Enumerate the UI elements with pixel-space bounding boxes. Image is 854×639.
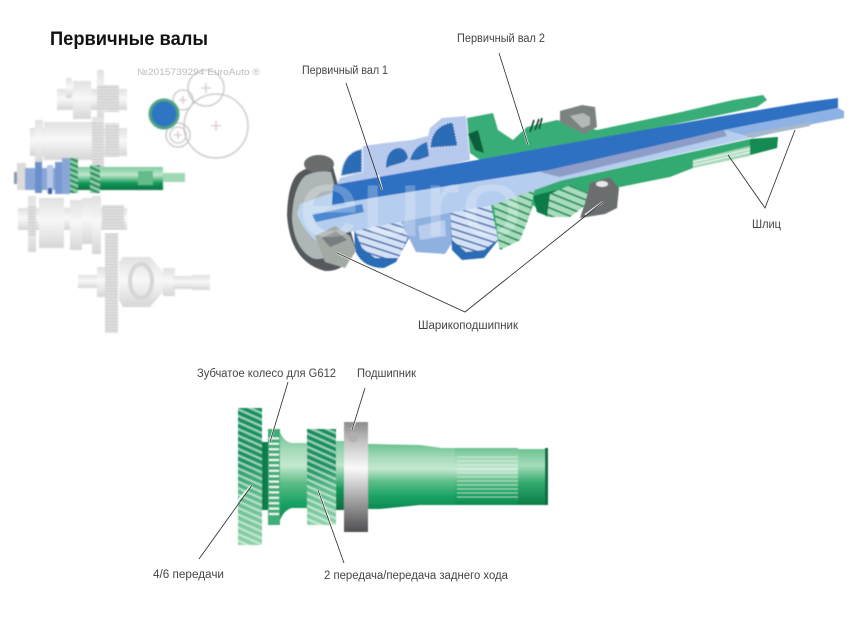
label: bearing: Подшипник [357,368,417,380]
upper gear 3 teeth [430,122,458,148]
differential [78,257,210,307]
label: spline: Шлиц [752,219,781,231]
label: gear 2 and reverse: 2 передача/передача заднего хода [324,570,509,582]
label: ball bearing: Шарикоподшипник [418,320,519,332]
gear: G612 sensor wheel [268,429,280,525]
lower blue gears [354,214,409,268]
background watermark letters: euro [298,150,523,257]
illustration: input shaft 2 side view [238,408,548,545]
coloured input shaft [14,172,19,184]
gear: 2 / reverse [307,429,336,525]
bearing [344,422,368,532]
blue input shaft [332,98,838,205]
upper gear 1 teeth [341,149,362,176]
upper gray gear set [18,70,127,254]
watermark id: №2015739294 EuroAuto ® [137,67,260,78]
splines [457,457,518,497]
bearing: upper [560,105,597,134]
gear mesh circles [166,70,248,158]
title: Первичные валы [50,28,208,50]
label: input shaft 2: Первичный вал 2 [457,33,545,45]
shaft body [368,444,455,509]
input shaft cross-section [150,100,178,128]
leader lines [199,53,795,563]
shaft neck [262,442,268,510]
gear window 1 [386,148,408,168]
gear window 2 [410,142,429,160]
gear: 4/6 [238,408,262,545]
label: G612 gear: Зубчатое колесо для G612 [197,368,336,380]
bearing: front [315,226,356,268]
label: input shaft 1: Первичный вал 1 [302,65,388,77]
illustration: cutaway of input shafts [287,95,844,271]
diagram: gearbox overview [14,70,248,333]
lower green gears [490,176,600,250]
upper green hollow shaft [467,95,767,160]
bearing: right [580,177,619,218]
upper blue gear bodies [336,116,470,192]
label: gears 4/6: 4/6 передачи [153,569,224,581]
lower green shaft [560,137,778,192]
bearing: left ring [287,166,356,271]
